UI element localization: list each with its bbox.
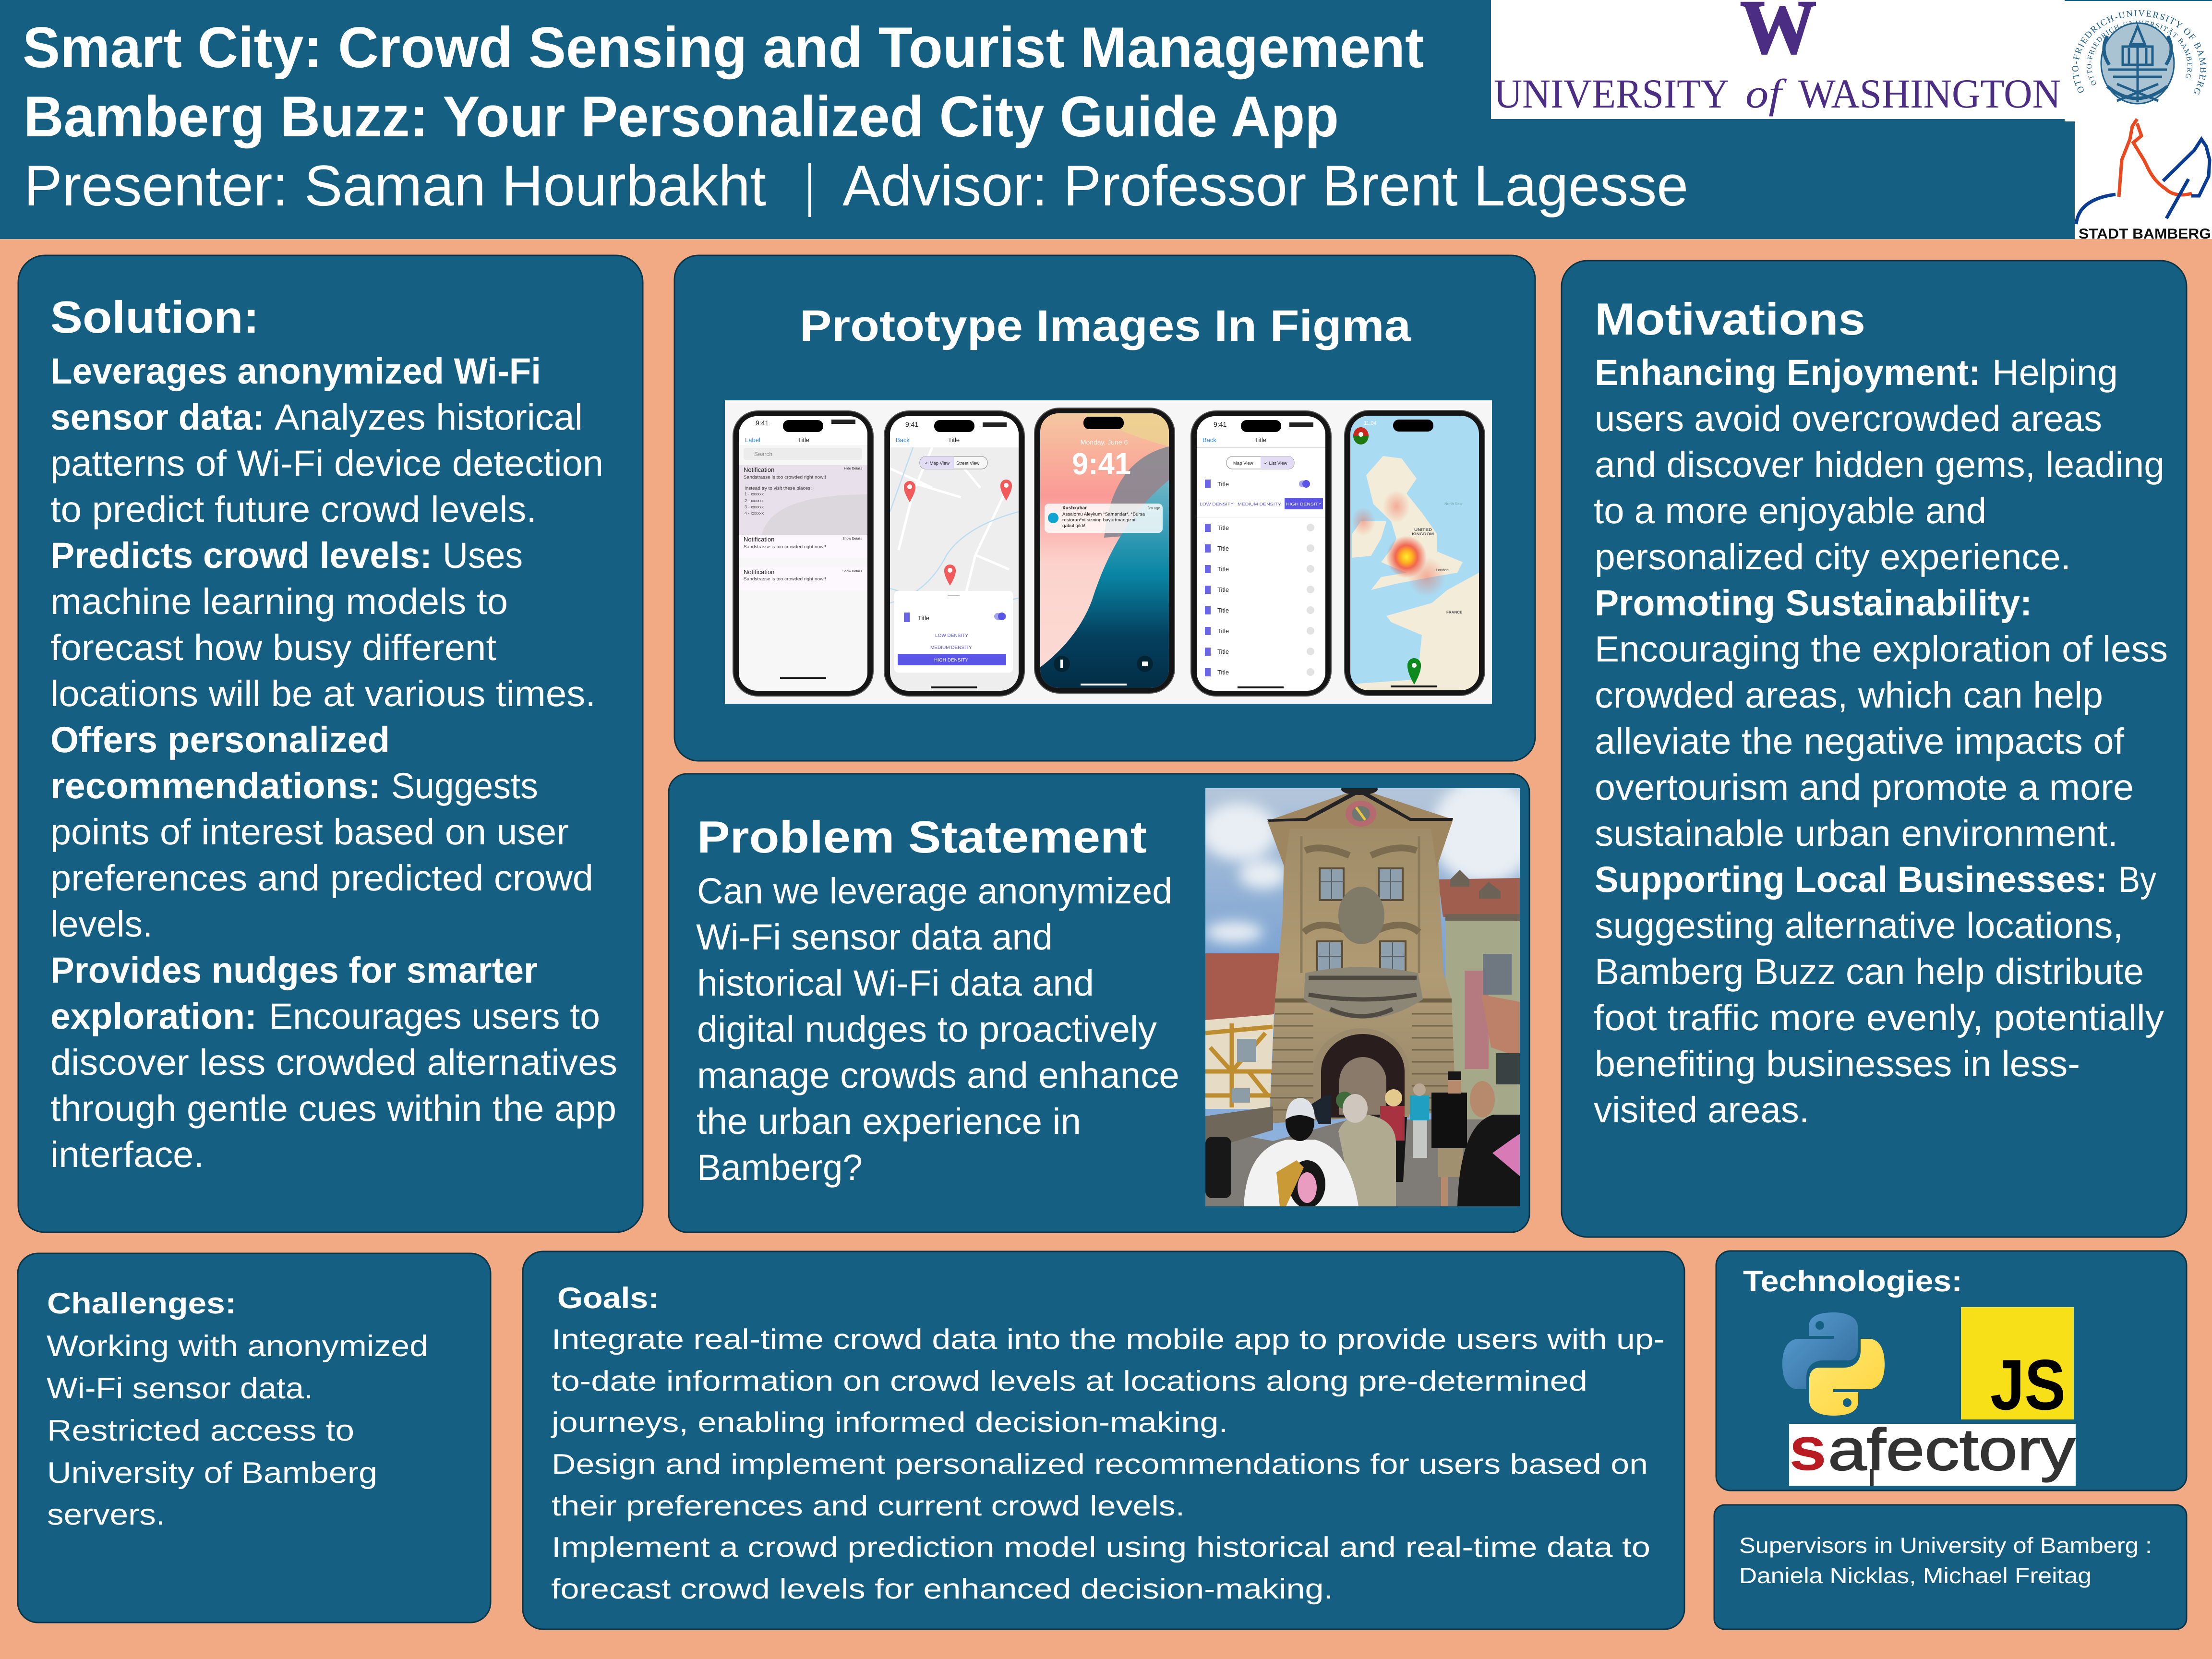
phone 3: lock screen: restoran*ni sizning buyurtmangizni	[1062, 517, 1135, 523]
phone 1: notifications: 1 - xxxxxx	[745, 492, 764, 496]
phone 3: lock screen: qabul qildi!	[1062, 523, 1085, 529]
street and low wall	[1205, 1119, 1520, 1206]
solution body text: locations will be at various times.	[50, 673, 596, 714]
phone 4: list view: Title	[1217, 565, 1229, 573]
phone 1: notifications: Sandstrasse is too crowded right now!!	[744, 544, 826, 550]
phone 4: list view: Title	[1217, 627, 1229, 635]
heading: challenges: Challenges:	[47, 1287, 236, 1320]
phone 2: map view: Title	[948, 436, 960, 444]
phone 1: notifications: Search	[754, 451, 772, 457]
phone 5: crowd heat map: North Sea	[1444, 502, 1462, 506]
solution body text: recommendations:	[50, 766, 381, 806]
goals body: journeys, enabling informed decision-making.	[551, 1407, 1228, 1438]
goals body: Integrate real-time crowd data into the mobile app to provide users with up-	[552, 1323, 1665, 1355]
phone 4: list view: Back	[1202, 436, 1216, 444]
phone 1: notifications: Instead try to visit these places:	[745, 486, 812, 491]
panel: supervisors	[1714, 1505, 2187, 1629]
motivations body text: foot traffic more evenly, potentially	[1594, 998, 2164, 1038]
heading: motivations: Motivations	[1595, 294, 1865, 344]
phone 2: map view: LOW DENSITY	[935, 633, 968, 638]
panel: prototype images	[674, 255, 1535, 761]
phone 5: crowd heat map: FRANCE	[1446, 610, 1463, 614]
phone 1: notifications: Title	[798, 436, 809, 444]
phone 3: lock screen	[1034, 408, 1175, 693]
supervisors text	[1739, 1533, 2152, 1588]
phone 2: map view: Title	[918, 614, 929, 622]
motivations body text: Promoting Sustainability:	[1595, 583, 2032, 624]
motivations body text: and discover hidden gems, leading	[1595, 445, 2164, 485]
phone 5: crowd heat map	[1345, 410, 1485, 696]
phone 4: list view: Title	[1217, 545, 1229, 552]
phone 1: notifications: Hide Details	[844, 467, 862, 470]
motivations body text: overtourism and promote a more	[1595, 767, 2134, 808]
phone 1: notifications	[733, 411, 873, 696]
logo: University of Bamberg seal	[2065, 1, 2212, 121]
icon: Python logo	[1782, 1312, 1885, 1416]
heading: goals: Goals:	[557, 1282, 659, 1315]
motivations body text: alleviate the negative impacts of	[1595, 721, 2125, 762]
solution body text: discover less crowded alternatives	[50, 1042, 617, 1083]
phone 1: notifications: 9:41	[756, 419, 769, 427]
icon: safectory logo: afectory	[1828, 1417, 2076, 1483]
logo: University of Bamberg seal: OTTO-FRIEDRICH-UNIVERSITÄT BAMBERG	[2087, 20, 2192, 85]
panel: problem statement	[669, 774, 1537, 1232]
phone 4: list view: MEDIUM DENSITY	[1238, 502, 1281, 506]
phone 4: list view: Title	[1217, 586, 1229, 593]
problem statement body: Can we leverage anonymized	[697, 871, 1172, 912]
phone 4: list view: Title	[1217, 607, 1229, 614]
goals body: Implement a crowd prediction model using historical and real-time data to	[552, 1531, 1650, 1563]
solution body text: to predict future crowd levels.	[50, 489, 537, 530]
header band	[0, 0, 2212, 239]
phone 1: notifications: Notification	[744, 466, 774, 473]
problem statement body: the urban experience in	[697, 1101, 1081, 1142]
goals body	[551, 1323, 1665, 1605]
goals body: their preferences and current crowd levels.	[552, 1490, 1185, 1522]
solution body text: Offers personalized	[50, 720, 390, 760]
motivations body text: sustainable urban environment.	[1595, 813, 2118, 854]
motivations body text: users avoid overcrowded areas	[1595, 398, 2102, 439]
problem statement body: Wi-Fi sensor data and	[696, 917, 1053, 958]
logo: University of Washington: WASHINGTON	[1798, 71, 2061, 117]
phone 1: notifications: Show Details	[842, 569, 862, 573]
motivations body text: By	[2118, 859, 2156, 900]
figure: phone mockups	[725, 400, 1492, 704]
phone 2: map view: Street View	[956, 461, 980, 466]
phone 4: list view: Title	[1217, 481, 1229, 488]
solution body text: through gentle cues within the app	[50, 1088, 616, 1129]
phone 3: lock screen: Assalomu Aleykum *Samandar*, *Bursa	[1062, 512, 1145, 517]
motivations body text: personalized city experience.	[1595, 537, 2071, 577]
motivations body text: Enhancing Enjoyment:	[1595, 352, 1981, 393]
motivations body text: Bamberg Buzz can help distribute	[1595, 951, 2144, 992]
phone 3: lock screen: 3m ago	[1147, 506, 1161, 510]
icon: safectory logo	[1789, 1415, 2076, 1486]
phone 4: list view: Title	[1217, 648, 1229, 655]
motivations body text: Supporting Local Businesses:	[1595, 859, 2107, 900]
solution body text: Leverages anonymized Wi-Fi	[50, 351, 541, 392]
logo: University of Washington: of	[1745, 71, 1787, 117]
phone 2: map view: HIGH DENSITY	[934, 658, 968, 663]
panel: challenges	[18, 1253, 491, 1623]
phone 3: lock screen: Monday, June 6	[1081, 438, 1128, 446]
phone 1: notifications: Notification	[744, 568, 774, 576]
panel: solution	[18, 255, 643, 1232]
phone 4: list view: 9:41	[1214, 421, 1226, 428]
phone 1: notifications: 3 - xxxxxx	[745, 505, 764, 509]
phone 4: list view: HIGH DENSITY	[1286, 502, 1322, 506]
icon: JavaScript logo	[1961, 1307, 2074, 1425]
solution body text	[50, 351, 617, 1175]
solution body text: Uses	[443, 535, 523, 576]
goals body: to-date information on crowd levels at locations along pre-determined	[552, 1365, 1587, 1397]
phone 5: crowd heat map: KINGDOM	[1412, 532, 1434, 536]
heading: solution: Solution:	[50, 292, 259, 342]
phone 4: list view: Title	[1217, 524, 1229, 531]
phone 4: list view: LOW DENSITY	[1200, 502, 1234, 506]
logo: Stadt Bamberg: STADT BAMBERG	[2079, 226, 2211, 242]
phone 4: list view: Title	[1217, 669, 1229, 676]
icon: JavaScript logo: JS	[1990, 1345, 2066, 1425]
supervisors text: Supervisors in University of Bamberg :	[1739, 1533, 2152, 1558]
problem statement body	[696, 871, 1179, 1188]
panel: goals	[523, 1251, 1684, 1629]
solution body text: machine learning models to	[50, 581, 508, 622]
solution body text: preferences and predicted crowd	[50, 858, 593, 899]
solution body text: points of interest based on user	[50, 812, 569, 853]
solution body text: Suggests	[391, 766, 538, 806]
motivations body text: visited areas.	[1594, 1090, 1809, 1130]
problem statement body: Bamberg?	[697, 1147, 863, 1188]
phone 5: crowd heat map: London	[1436, 568, 1449, 572]
motivations body text: Encouraging the exploration of less	[1595, 629, 2168, 670]
phone 2: map view: Back	[896, 436, 910, 444]
phone 5: crowd heat map: 11:04	[1364, 421, 1377, 426]
motivations body text: to a more enjoyable and	[1594, 491, 1986, 531]
goals body: Design and implement personalized recommendations for users based on	[552, 1448, 1648, 1480]
solution body text: sensor data:	[50, 397, 264, 438]
phone 1: notifications: Label	[745, 436, 760, 444]
challenges body	[47, 1330, 428, 1531]
logo: University of Washington	[1491, 0, 2065, 119]
goals body: forecast crowd levels for enhanced decision-making.	[551, 1573, 1333, 1605]
solution body text: levels.	[50, 904, 153, 945]
phone 4: list view	[1191, 411, 1331, 696]
challenges body: Wi-Fi sensor data.	[47, 1372, 313, 1405]
phone 2: map view: MEDIUM DENSITY	[930, 645, 972, 650]
phone 5: crowd heat map: UNITED	[1414, 528, 1432, 532]
challenges body: University of Bamberg	[47, 1456, 377, 1490]
panel: motivations	[1562, 261, 2187, 1237]
motivations body text	[1594, 352, 2168, 1130]
phone 1: notifications: 2 - xxxxxx	[745, 498, 764, 503]
phone 4: list view: Title	[1255, 436, 1266, 444]
phone 1: notifications: Notification	[744, 536, 774, 543]
logo: Stadt Bamberg	[2075, 119, 2212, 242]
tourists	[1205, 1137, 1231, 1198]
challenges body: Working with anonymized	[47, 1330, 428, 1363]
motivations body text: Helping	[1992, 352, 2118, 393]
supervisors text: Daniela Nicklas, Michael Freitag	[1739, 1563, 2092, 1588]
phone 4: list view: ✓ List View	[1264, 461, 1287, 466]
solution body text: exploration:	[50, 996, 257, 1037]
phone 1: notifications: 4 - xxxxxx	[745, 511, 764, 516]
left half-timbered house	[1205, 953, 1280, 1020]
solution body text: Encourages users to	[269, 996, 600, 1037]
problem statement body: manage crowds and enhance	[697, 1055, 1179, 1096]
logo: University of Washington: UNIVERSITY	[1494, 71, 1729, 117]
solution body text: interface.	[50, 1134, 204, 1175]
title line 1: Smart City: Crowd Sensing and Tourist Management	[23, 15, 1424, 80]
challenges body: Restricted access to	[47, 1414, 354, 1447]
phone 2: map view: 9:41	[905, 421, 918, 428]
title line 2: Bamberg Buzz: Your Personalized City Guide App	[24, 84, 1339, 149]
problem statement body: historical Wi-Fi data and	[697, 963, 1094, 1004]
solution body text: Predicts crowd levels:	[50, 535, 432, 576]
phone 4: list view: Map View	[1233, 461, 1253, 466]
solution body text: forecast how busy different	[50, 627, 496, 668]
phone 2: map view	[884, 411, 1024, 696]
challenges body: servers.	[47, 1498, 165, 1531]
panel: technologies	[1716, 1251, 2187, 1491]
baroque tower	[1270, 828, 1456, 1123]
presenter and advisor line	[24, 154, 1688, 218]
problem statement body: digital nudges to proactively	[697, 1009, 1157, 1050]
motivations body text: suggesting alternative locations,	[1595, 905, 2123, 946]
phone 2: map view: ✓ Map View	[925, 461, 950, 466]
logo: University of Bamberg seal: OTTO-FRIEDRICH-UNIVERSITY OF BAMBERG	[2072, 10, 2206, 95]
solution body text: Analyzes historical	[275, 397, 583, 438]
photo: Bamberg old town hall with tourists	[1205, 788, 1520, 1206]
presenter and advisor line: Presenter: Saman Hourbakht	[24, 154, 766, 218]
presenter and advisor line: Advisor: Professor Brent Lagesse	[842, 154, 1688, 218]
right painted building	[1438, 878, 1520, 921]
heading: problem statement: Problem Statement	[697, 812, 1147, 862]
solution body text: patterns of Wi-Fi device detection	[50, 443, 603, 484]
motivations body text: benefiting businesses in less-	[1595, 1044, 2080, 1084]
phone 3: lock screen: 9:41	[1072, 446, 1131, 481]
phone 1: notifications: Sandstrasse is too crowded right now!!	[744, 577, 826, 582]
phone 1: notifications: Sandstrasse is too crowded right now!!	[744, 475, 826, 480]
phone 3: lock screen: Xushxabar	[1062, 505, 1087, 511]
heading: technologies: Technologies:	[1743, 1265, 1962, 1298]
motivations body text: crowded areas, which can help	[1595, 675, 2103, 716]
phone 1: notifications: Show Details	[842, 537, 862, 541]
heading: prototype images in Figma: Prototype Images In Figma	[800, 301, 1411, 350]
solution body text: Provides nudges for smarter	[50, 950, 538, 991]
icon: safectory logo: s	[1789, 1415, 1827, 1483]
